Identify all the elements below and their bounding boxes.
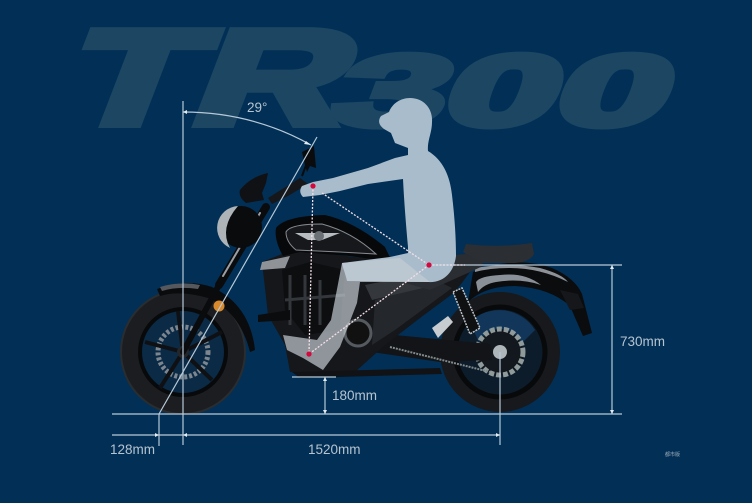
shock absorber [453,288,480,334]
wheelbase dimension line [112,434,500,436]
swingarm and chain [358,332,492,362]
rear wheel [440,292,560,412]
rider silhouette [283,98,456,370]
dimension labels [110,100,665,457]
label: city edition: 都市版 [665,451,680,458]
arrowheads [155,110,614,437]
label: trail: 128mm [110,442,155,457]
label: footpeg height: 180mm [332,388,377,403]
rider lower leg (translucent) [283,258,430,370]
foot point [306,351,312,357]
mirror [302,146,316,172]
ergonomic triangle [306,183,465,357]
trail vertical [158,414,160,446]
rear fender and tail [468,262,592,336]
title: TR300 watermark: TR [46,2,383,153]
rider body [300,98,456,282]
title: TR300 watermark [46,2,694,153]
label: rake angle: 29° [247,100,267,115]
title: TR300 watermark: 300 [318,35,694,146]
instrument cluster [240,173,268,203]
front fender [157,283,255,352]
headlight [217,206,262,248]
front axle vertical [182,101,184,445]
frame and engine [262,250,470,372]
handlebar [268,178,308,204]
measurement lines [112,101,622,446]
steering rake line [159,137,317,414]
motorcycle [121,146,592,414]
rear axle vertical [499,352,501,445]
ground line [112,413,622,415]
label: seat height: 730mm [620,334,665,349]
front wheel [121,290,245,414]
seat height arrow line [611,265,613,414]
rear rack and reflector [560,290,584,310]
label: wheelbase: 1520mm [308,442,361,457]
seat height reference [430,264,622,266]
rake arc [183,112,311,145]
peg height arrow line [324,377,326,414]
hip point [426,262,432,268]
dotted links [309,186,465,354]
hand point [310,183,316,189]
peg reference [292,376,336,378]
fuel tank [276,215,392,262]
fork [183,207,266,352]
seat [463,243,534,263]
turn signal [214,300,224,312]
